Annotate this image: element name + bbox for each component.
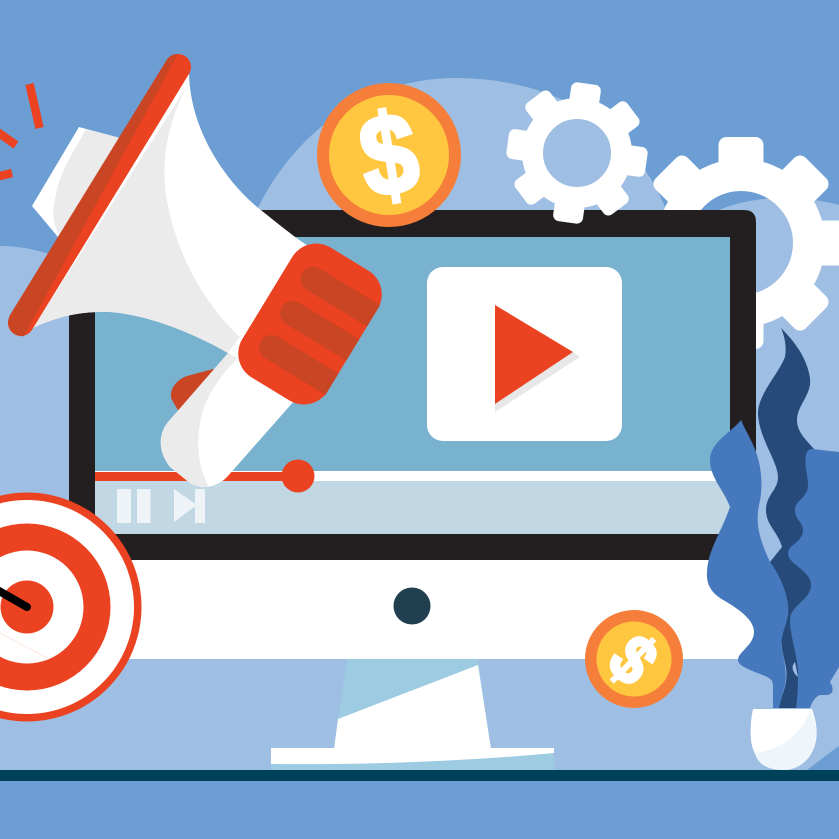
trigger [171,368,217,412]
grip [161,340,295,487]
next icon [174,489,205,523]
control bar [95,481,730,534]
dart [0,588,27,607]
coin: large dollar [317,83,461,227]
dark leaf [758,328,825,708]
play card [427,267,622,441]
right leaf [788,449,839,708]
megaphone back white [32,127,120,237]
megaphone [8,54,392,487]
horn [33,73,310,355]
horn shade [33,83,240,353]
plant pot [751,709,817,770]
monitor screen [95,237,730,471]
rim shade [8,54,178,336]
background corner [807,746,839,770]
monitor [69,210,756,659]
large gear [635,137,839,349]
target [0,492,142,722]
handle stripes [255,262,380,395]
plant [707,328,839,770]
monitor stand [271,659,554,770]
rim [21,67,178,323]
sound rays [0,84,40,177]
monitor chin [69,560,756,659]
coin: small dollar [585,610,683,708]
coin: large dollar: $ [351,87,426,222]
shelf [0,770,839,781]
handle [228,233,392,415]
monitor frame [69,210,756,560]
coin: small dollar: $ [594,620,673,699]
mid leaf [707,420,788,708]
pause icon [117,489,150,523]
leaf gap [793,662,798,677]
small gear [506,82,648,224]
progress bar fill and thumb [95,460,314,492]
progress track [95,471,730,481]
pot shading [755,710,817,770]
megaphone back shade [53,129,120,237]
grip shade [161,353,238,487]
power button [394,588,430,624]
